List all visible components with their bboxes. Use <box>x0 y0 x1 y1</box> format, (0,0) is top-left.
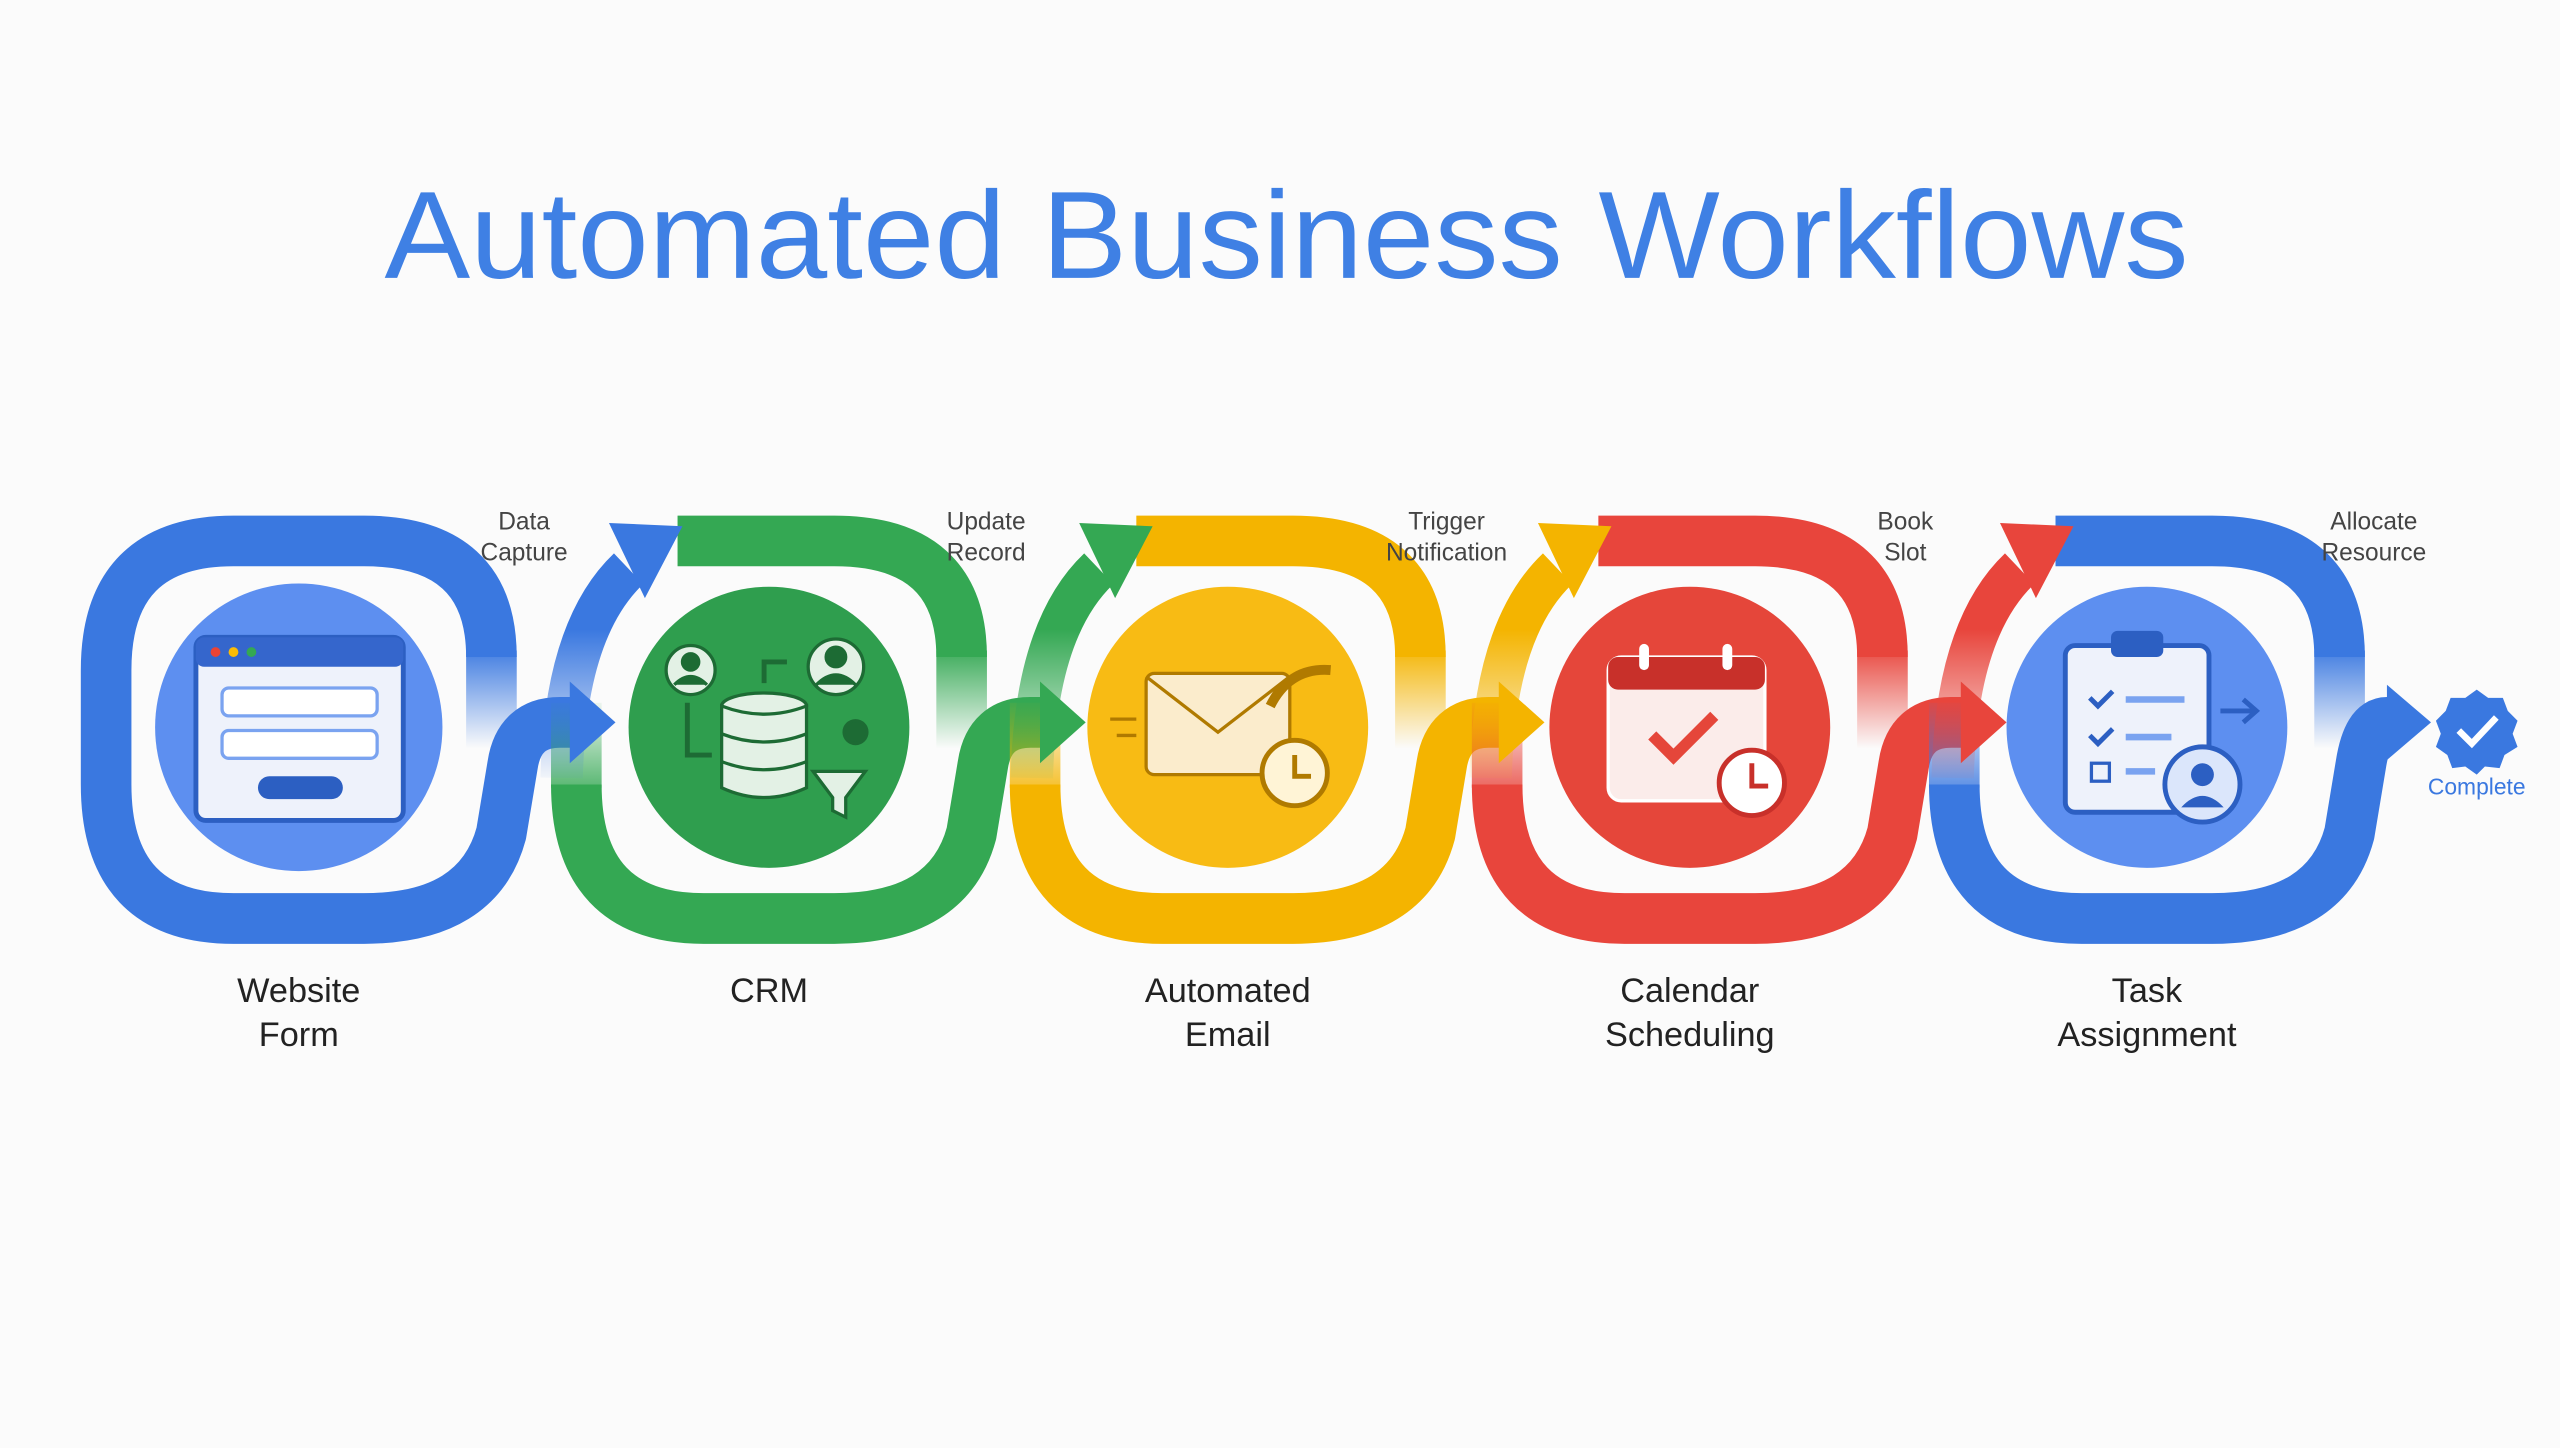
step label: Data Capture: Data <box>498 509 550 536</box>
loop: website form (blue) <box>106 541 576 918</box>
icon: clipboard with person <box>2065 631 2256 822</box>
step label: Book Slot: Book <box>1877 509 1934 536</box>
step label: Book Slot <box>1877 509 1934 567</box>
stage 5: Task Assignment: Assignment <box>2057 1016 2237 1054</box>
arrow heads <box>570 523 2431 763</box>
loop: calendar (red) <box>1497 541 1967 918</box>
stage 2: CRM: CRM <box>730 972 808 1010</box>
arrow: green to email <box>1032 569 1099 778</box>
stage 3: Automated Email <box>1087 587 1368 1054</box>
step label: Update Record: Record <box>947 540 1026 567</box>
stage 4: Calendar Scheduling: Calendar <box>1620 972 1759 1010</box>
step label: Trigger Notification: Notification <box>1386 540 1507 567</box>
circle <box>155 583 442 871</box>
step label: Trigger Notification: Trigger <box>1408 509 1485 536</box>
stage 5: Task Assignment: Task <box>2112 972 2183 1010</box>
loop: automated email (yellow) <box>1035 541 1505 918</box>
arrow: red to task <box>1953 569 2020 778</box>
icon: CRM database <box>666 639 867 817</box>
flow loops <box>106 541 2397 918</box>
loop: CRM (green) <box>576 541 1047 918</box>
stage 4: Calendar Scheduling: Scheduling <box>1605 1016 1775 1054</box>
step label: Update Record <box>947 509 1026 567</box>
step label: Data Capture <box>481 509 568 567</box>
step label: Allocate Resource: Allocate <box>2330 509 2417 536</box>
step label: Allocate Resource <box>2321 509 2426 567</box>
icon: envelope with clock <box>1110 670 1331 806</box>
stage 3: Automated Email: Automated <box>1145 972 1311 1010</box>
title: Automated Business Workflows <box>384 167 2189 305</box>
stage 1: Website Form: Form <box>259 1016 339 1054</box>
arrow: yellow to calendar <box>1491 569 1558 778</box>
complete badge <box>2428 690 2526 799</box>
stage 4: Calendar Scheduling <box>1549 587 1830 1054</box>
icon: website form <box>196 637 403 820</box>
stage 3: Automated Email: Email <box>1185 1016 1271 1054</box>
loop: task (blue) <box>1954 541 2397 918</box>
icon: calendar <box>1608 644 1784 816</box>
step label: Book Slot: Slot <box>1884 540 1927 567</box>
step label: Trigger Notification <box>1386 509 1507 567</box>
step label: Data Capture: Capture <box>481 540 568 567</box>
step label: Update Record: Update <box>947 509 1026 536</box>
rising connector arrows <box>562 569 2020 778</box>
stage 5: Task Assignment <box>2007 587 2287 1054</box>
label: Website <box>237 972 360 1010</box>
complete badge: Complete <box>2428 773 2526 799</box>
stage 1: Website Form <box>155 583 442 1054</box>
arrow: blue to CRM <box>562 569 629 778</box>
stage 2: CRM <box>629 587 909 1010</box>
step label: Allocate Resource: Resource <box>2321 540 2426 567</box>
